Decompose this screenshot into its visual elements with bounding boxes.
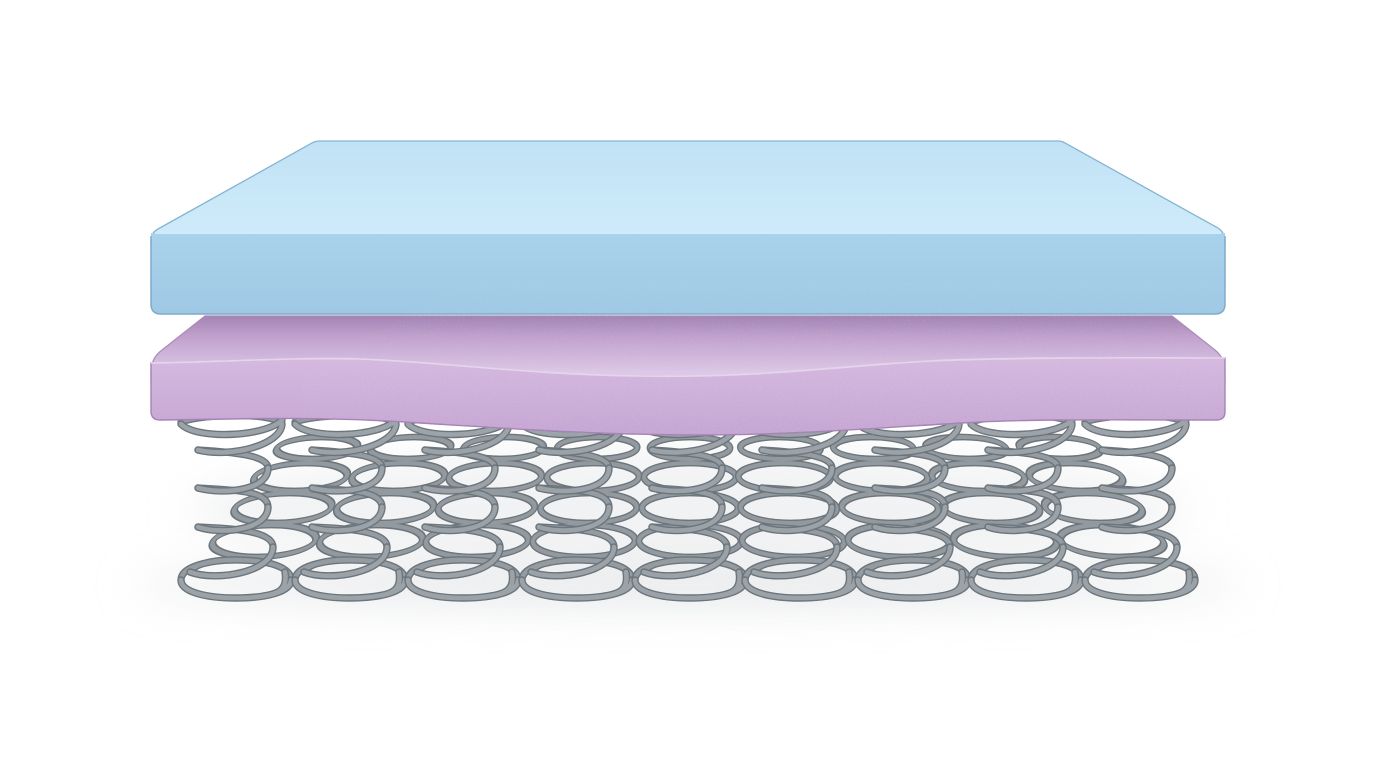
purple layer: front edge highlight [151,358,1225,376]
panel: purple support foam layer [151,316,1225,435]
blue layer: front face [151,233,1225,314]
ground shadow under springs [128,450,1248,605]
illustration: layered mattress over coil springs [150,140,1226,617]
foam texture [308,314,1226,435]
blue layer: front edge highlight [155,232,1221,234]
panel: blue memory foam layer [151,141,1225,314]
springs: front row [181,415,1195,598]
blue layer: top face [151,141,1225,245]
blue layer: outline of front face [151,236,1225,314]
purple layer: front face with wavy profile [151,358,1225,435]
springs: back row [204,437,1172,557]
purple layer: top face [151,316,1225,380]
